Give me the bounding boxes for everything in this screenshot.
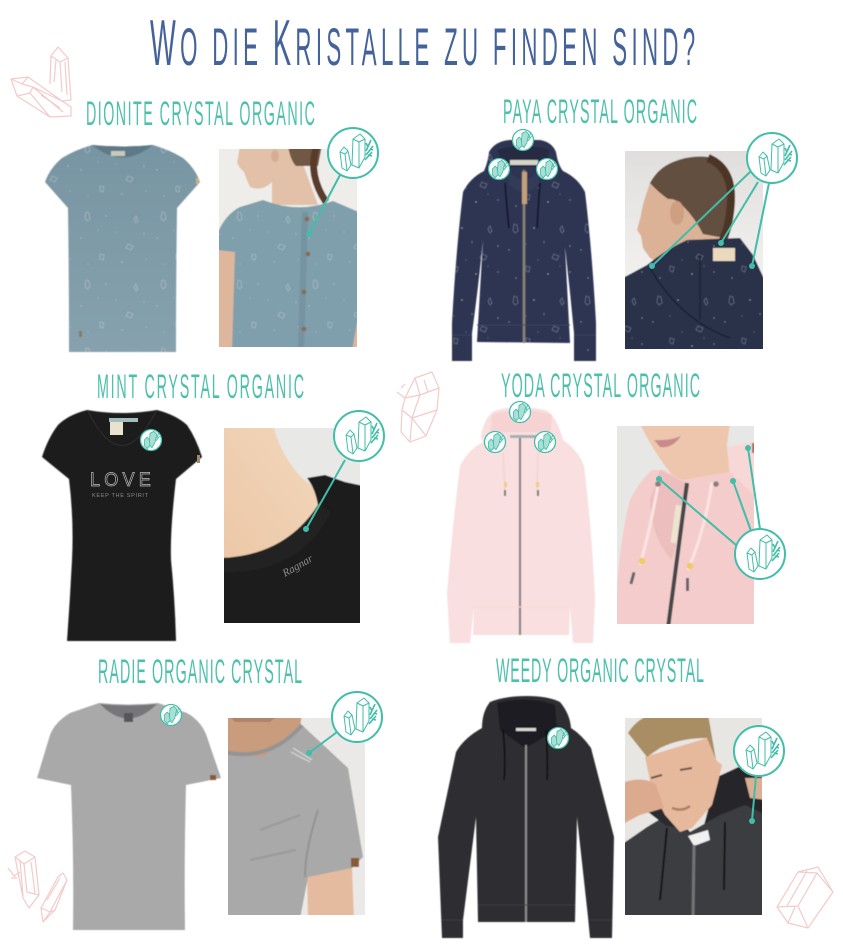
panel: Yoda Crystal Organic — [447, 366, 785, 643]
detail photo — [621, 147, 767, 353]
pointer lines and dots — [656, 445, 760, 545]
heading: RADIE ORGANIC CRYSTAL — [98, 652, 302, 691]
panel: Weedy Organic Crystal — [438, 651, 784, 938]
front view t-shirt — [42, 410, 202, 641]
decoration: pink crystal bottom right — [777, 867, 833, 928]
icon: crystal callout — [735, 529, 785, 579]
detail photo — [215, 145, 361, 351]
front view t-shirt — [37, 703, 221, 930]
icon: crystal callout — [332, 692, 382, 742]
detail photo — [224, 714, 369, 919]
detail photo — [220, 424, 364, 627]
heading: MINT CRYSTAL ORGANIC — [97, 367, 304, 406]
icon: crystal callout — [334, 411, 384, 461]
heading: WEEDY ORGANIC CRYSTAL — [496, 651, 704, 690]
icon: crystal callout — [734, 726, 784, 776]
pointer line and dot — [306, 732, 337, 756]
detail photo — [613, 422, 758, 628]
icon: crystal callout — [328, 128, 378, 178]
title: WO DIE KRISTALLE ZU FINDEN SIND? — [150, 6, 695, 79]
front view hoodie — [438, 696, 614, 938]
chest print: tagline: KEEP THE SPIRIT — [92, 493, 149, 499]
embroidered script: Ragnar — [280, 552, 316, 580]
front view hoodie — [452, 140, 596, 361]
chest print: LOVE: LOVE — [90, 469, 151, 490]
icons: small crystal markers — [488, 130, 558, 180]
front view hoodie — [447, 407, 595, 643]
pointer lines and dots — [649, 172, 769, 269]
heading: PAYA CRYSTAL ORGANIC — [503, 92, 697, 131]
icon: small crystal marker — [140, 430, 162, 450]
pointer line and dot — [306, 175, 340, 237]
icon: small crystal marker — [548, 728, 568, 748]
icon: crystal callout — [747, 133, 797, 183]
pointer line and dot — [303, 460, 345, 532]
pointer line and dot — [749, 776, 756, 824]
decoration: pink crystals bottom left — [8, 851, 67, 922]
panel: Mint Crystal Organic — [42, 367, 384, 641]
icon: small crystal marker — [160, 704, 182, 726]
panel: Radie Organic Crystal — [37, 652, 382, 930]
panel: Dionite Crystal Organic — [45, 94, 378, 352]
decoration: pink crystal centre — [397, 372, 439, 442]
icons: small crystal markers — [484, 402, 556, 452]
detail photo — [621, 714, 766, 919]
heading: DIONITE CRYSTAL ORGANIC — [86, 94, 315, 133]
decoration: pink crystals top left — [11, 47, 71, 117]
heading: YODA CRYSTAL ORGANIC — [501, 366, 700, 405]
front view t-shirt — [45, 145, 200, 352]
panel: Paya Crystal Organic — [452, 92, 797, 361]
